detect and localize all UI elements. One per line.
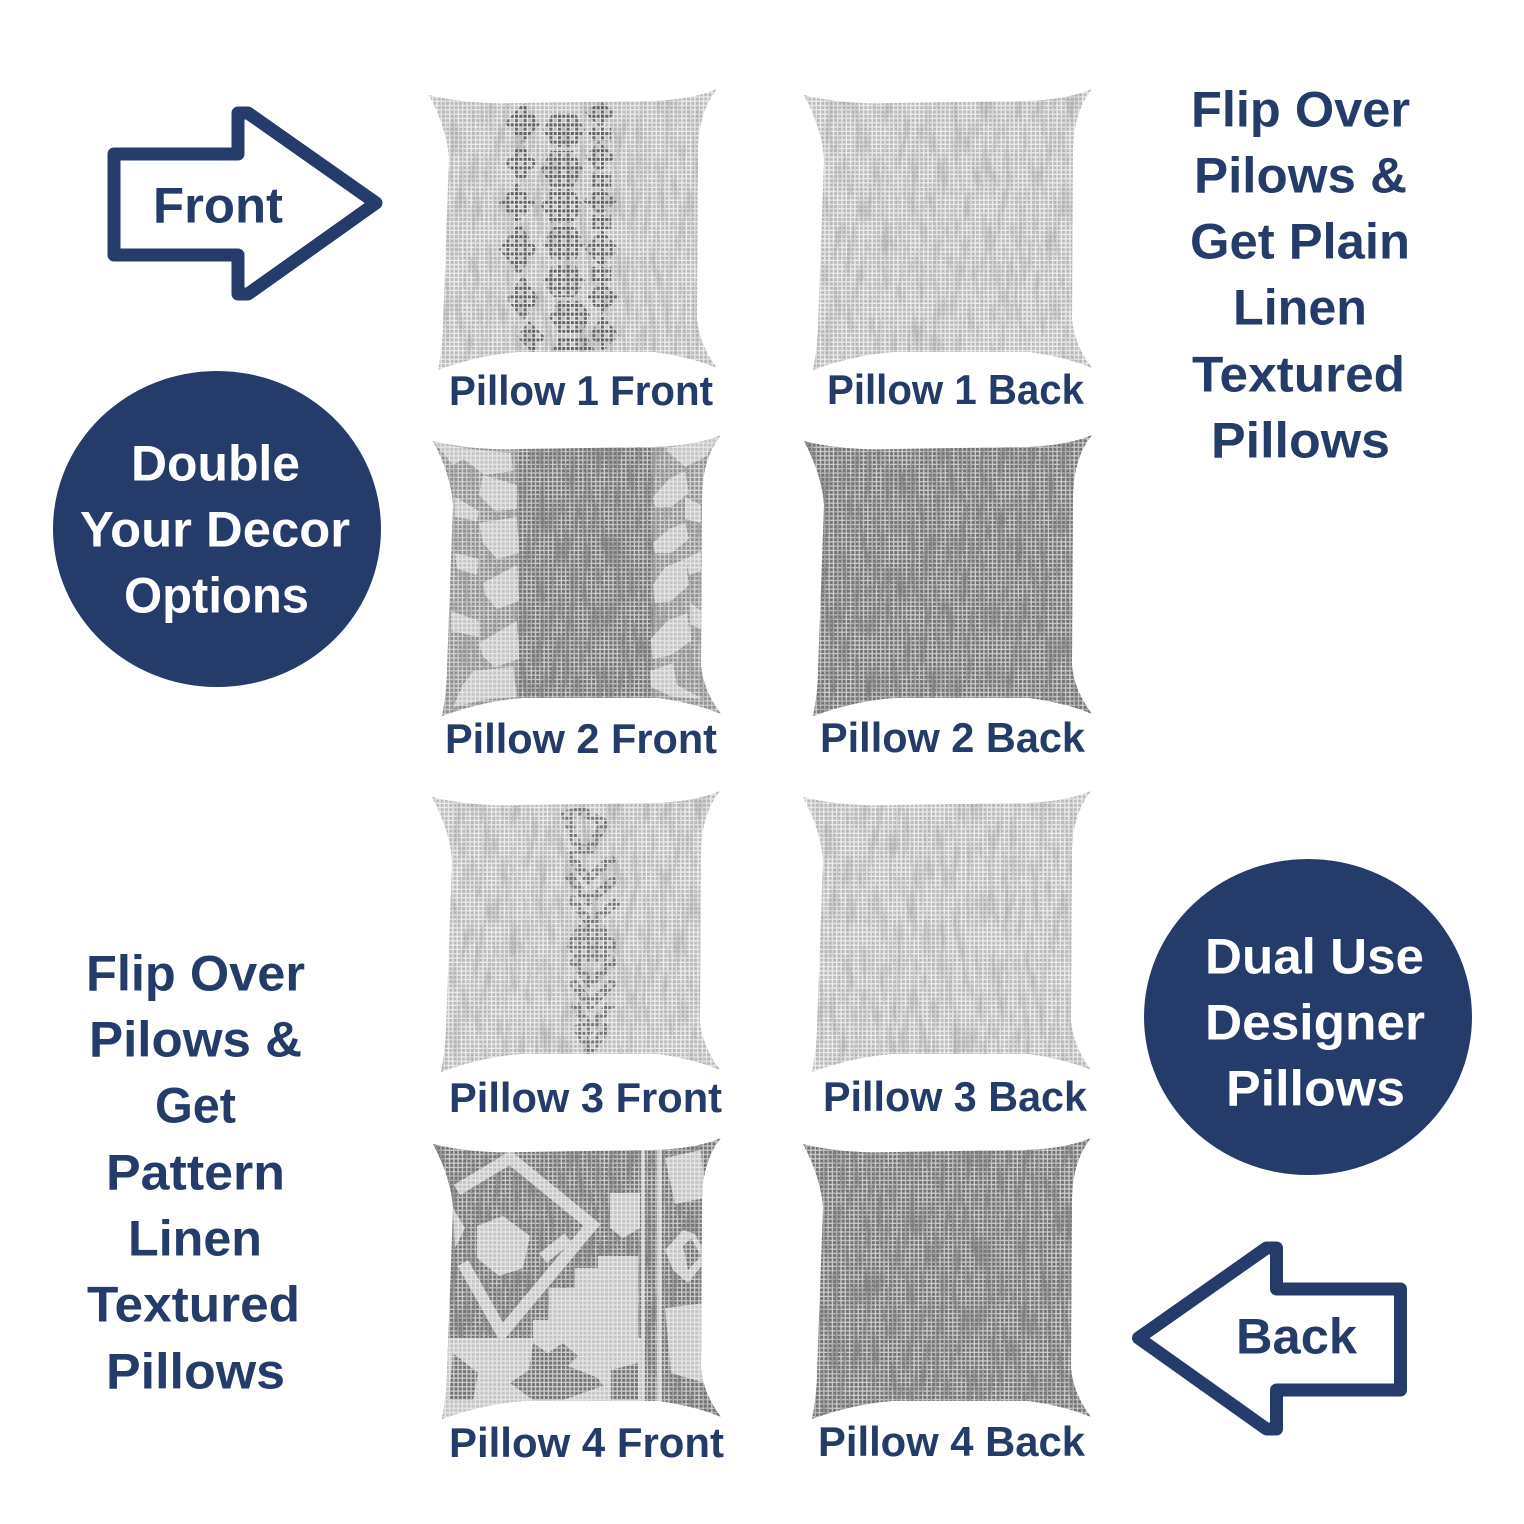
pillow 2 back — [804, 435, 1094, 720]
label: pillow 3 front: Pillow 3 Front — [449, 1074, 722, 1121]
label: pillow 4 front: Pillow 4 Front — [449, 1419, 724, 1466]
center arrow motif — [566, 811, 618, 1051]
text block: flip over for pattern linen: Linen — [128, 1210, 262, 1266]
label: pillow 3 back: Pillow 3 Back — [823, 1073, 1088, 1120]
text block: flip over for plain linen: Pillows — [1211, 412, 1390, 468]
side leaf motifs — [433, 435, 723, 720]
text block: flip over for plain linen — [1190, 82, 1410, 468]
arrow: front — [114, 113, 376, 294]
label: pillow 2 back: Pillow 2 Back — [820, 714, 1086, 761]
badge: double your decor options: Double — [131, 436, 300, 492]
motif columns — [499, 101, 619, 353]
label: pillow 1 back: Pillow 1 Back — [827, 366, 1085, 413]
text block: flip over for plain linen: Get Plain — [1190, 214, 1410, 270]
arrow: back: Back — [1236, 1308, 1357, 1364]
badge: dual use designer pillows: Designer — [1205, 994, 1425, 1050]
text block: flip over for plain linen: Textured — [1192, 346, 1405, 402]
pillow 4 front — [433, 1138, 723, 1423]
label: pillow 1 front: Pillow 1 Front — [449, 367, 713, 414]
pillow 2 front — [433, 435, 723, 720]
text block: flip over for pattern linen: Pattern — [106, 1144, 285, 1200]
pillow 3 back — [803, 791, 1093, 1076]
badge: dual use designer pillows: Dual Use — [1205, 928, 1424, 984]
text block: flip over for pattern linen: Pillows — [106, 1344, 285, 1400]
text block: flip over for plain linen: Pilows & — [1194, 148, 1407, 204]
badge: dual use designer pillows: Pillows — [1226, 1060, 1405, 1116]
label: pillow 2 front: Pillow 2 Front — [445, 715, 717, 762]
pillow 4 back — [803, 1138, 1093, 1423]
text block: flip over for pattern linen: Flip Over — [86, 946, 305, 1002]
pillow 1 front — [429, 89, 719, 374]
badge: double your decor options: Your Decor — [80, 502, 350, 558]
badge: dual use designer pillows — [1144, 859, 1472, 1175]
pillow 1 back — [804, 89, 1094, 374]
text block: flip over for plain linen: Flip Over — [1191, 82, 1410, 138]
arrow: back — [1138, 1248, 1400, 1429]
text block: flip over for pattern linen — [86, 946, 305, 1400]
text block: flip over for pattern linen: Pilows & — [89, 1012, 302, 1068]
arrow: front: Front — [153, 178, 283, 234]
label: pillow 4 back: Pillow 4 Back — [818, 1418, 1086, 1465]
badge: double your decor options: Options — [124, 568, 309, 624]
kilim motif — [443, 1138, 708, 1423]
text block: flip over for pattern linen: Get — [155, 1078, 236, 1134]
pillow 3 front — [432, 791, 722, 1076]
text block: flip over for plain linen: Linen — [1233, 280, 1367, 336]
text block: flip over for pattern linen: Textured — [87, 1276, 300, 1332]
badge: double your decor options — [53, 371, 381, 687]
